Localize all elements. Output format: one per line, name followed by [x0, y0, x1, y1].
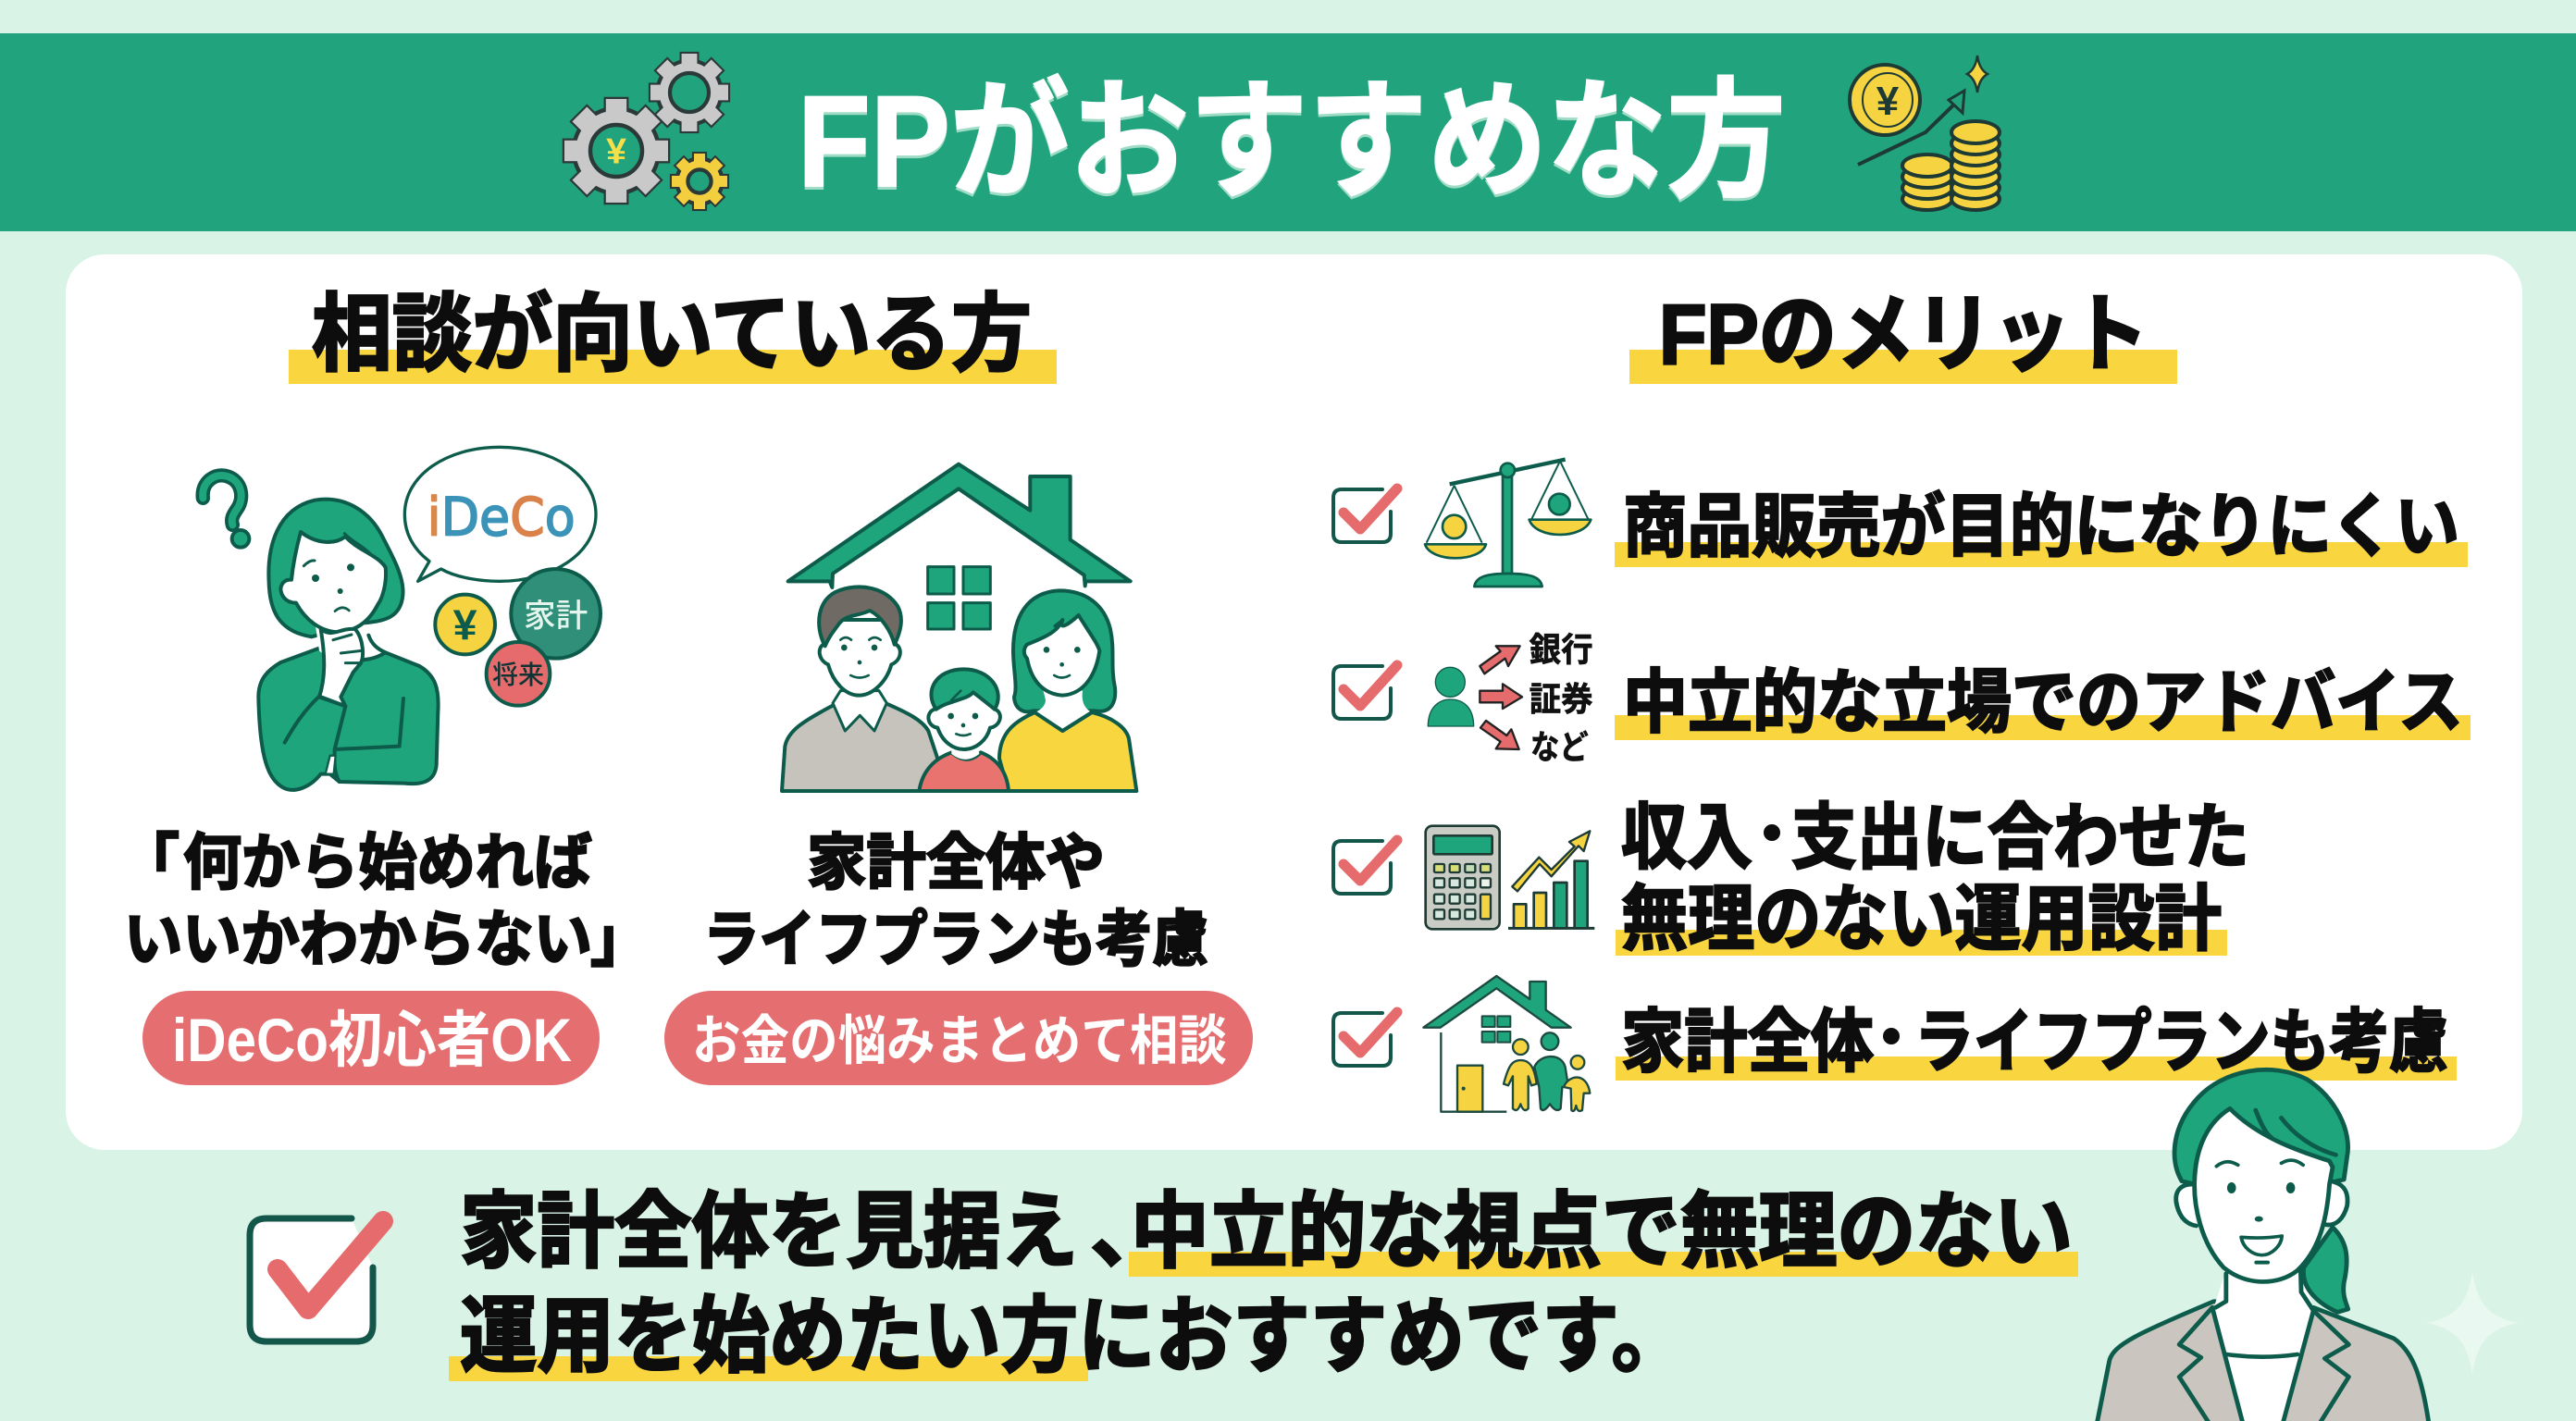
mother — [999, 590, 1136, 791]
row 4: 家計全体 — [1333, 976, 2457, 1112]
icon: person to bank and securities — [1428, 631, 1593, 766]
bubble: 将来 — [487, 642, 550, 706]
face — [280, 532, 386, 632]
caption: first steps: いいかわからない — [124, 905, 592, 973]
illustration: presenter — [2097, 1069, 2429, 1421]
bubble: 家計: 家計 — [524, 599, 588, 634]
message text — [460, 1186, 2073, 1383]
bottom message — [250, 1186, 2078, 1383]
face — [2195, 1108, 2333, 1281]
caption: household — [703, 828, 1208, 973]
body — [258, 648, 439, 790]
heading: FPのメリット: FPのメリット — [1659, 288, 2149, 382]
icon: coins and growth arrow — [1850, 56, 2000, 210]
check icon — [1333, 840, 1397, 894]
pill: iDeCo初心者OK: iDeCo初心者OK — [172, 1006, 572, 1074]
icon: question mark — [203, 476, 249, 548]
child — [919, 669, 1009, 791]
icon: person to bank and securities: 証券 — [1530, 680, 1593, 718]
check icon — [1333, 488, 1397, 542]
icon: person to bank and securities: 銀行 — [1530, 631, 1593, 669]
highlight and text: 商品販売が目的になりにくい — [1623, 488, 2459, 565]
message text: 運用を始めたい方におすすめです。 — [460, 1291, 1689, 1383]
icon: person to bank and securities: など — [1530, 728, 1589, 766]
hair — [2174, 1069, 2348, 1184]
caption: household: ライフプランも考慮 — [703, 905, 1208, 973]
main white panel — [66, 254, 2522, 1150]
sparkle — [2426, 1272, 2519, 1374]
highlight and two-line text: 無理のない運用設計 — [1621, 878, 2222, 959]
highlight and text: ライフプランも考慮 — [1914, 1003, 2448, 1081]
bubble: yen — [435, 595, 495, 654]
pill: iDeCo初心者OK — [142, 991, 600, 1085]
icon: gears — [564, 54, 728, 209]
bubble: 家計 — [511, 569, 601, 659]
message text: 中立的な視点で無理のない — [1131, 1186, 2073, 1279]
check icon — [1333, 665, 1397, 719]
highlight and two-line text: 支出に合わせた — [1791, 797, 2249, 878]
icon: coins and growth arrow: ¥ — [1876, 79, 1900, 124]
pill: お金の悩みまとめて相談 — [664, 991, 1253, 1085]
row 2: 中立的 — [1333, 631, 2471, 766]
check icon — [1333, 1012, 1397, 1066]
caption: first steps — [118, 828, 651, 973]
lapels — [2179, 1307, 2348, 1421]
highlight and two-line text — [1616, 797, 2249, 959]
jacket — [2097, 1302, 2429, 1421]
icon: scales — [1425, 460, 1591, 587]
message text: 、 — [1090, 1186, 1173, 1279]
father — [782, 587, 937, 791]
check icon large — [250, 1218, 383, 1341]
heading: 相談が向いている方: 相談が向いている方 — [312, 288, 1032, 382]
illustration: family and house — [782, 464, 1136, 791]
caption: first steps: 「 — [118, 828, 180, 896]
ponytail — [2303, 1228, 2348, 1312]
icon: calculator and growth chart — [1426, 826, 1594, 929]
illustration: thinking woman — [203, 447, 601, 790]
message text: 家計全体を見据え — [460, 1186, 1078, 1279]
row 3: 運用設計 — [1333, 797, 2249, 959]
roof — [788, 464, 1131, 587]
speech bubble — [404, 447, 596, 581]
window — [928, 567, 990, 629]
neck and collar — [315, 620, 386, 661]
speech bubble: iDeCo — [427, 487, 576, 548]
caption: household: 家計全体や — [807, 828, 1105, 896]
facial features — [2216, 1160, 2303, 1167]
pill: お金の悩みまとめて相談: お金の悩みまとめて相談 — [692, 1011, 1227, 1071]
shirt and neck — [2214, 1267, 2313, 1421]
row 1: 商品販売 — [1333, 460, 2468, 587]
bubble: 将来: 将来 — [492, 661, 544, 689]
highlight and text: 家計全体 — [1621, 1003, 1874, 1081]
hair — [268, 500, 403, 636]
highlight and text — [1616, 1003, 2457, 1081]
title: FPがおすすめな方 — [798, 68, 1786, 214]
header band — [0, 33, 2576, 231]
caption: first steps: 」 — [590, 905, 651, 973]
icon: house and family — [1423, 976, 1590, 1112]
bubble: yen: ¥ — [453, 601, 477, 649]
fringe — [2256, 1110, 2335, 1155]
highlights — [449, 1252, 2078, 1381]
ears — [2176, 1181, 2347, 1226]
hand and arm — [319, 629, 363, 706]
highlight and two-line text: 収入 — [1621, 797, 1752, 878]
highlight and text: 中立的な立場でのアドバイス — [1623, 663, 2463, 741]
caption: first steps: 何から始めれば — [183, 828, 592, 896]
